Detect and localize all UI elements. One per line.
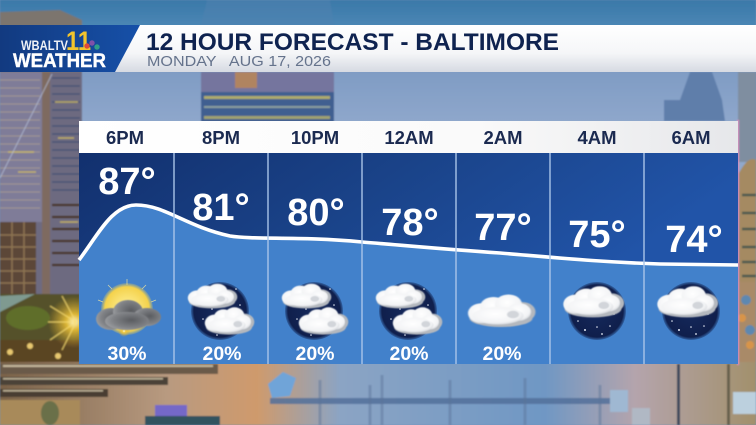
time labels: 6PM — [106, 127, 144, 148]
panel: forecast table — [79, 121, 738, 365]
time labels — [106, 127, 711, 148]
precipitation chances: 30% — [107, 343, 147, 365]
logo: WBAL TV 11 Weather: WEATHER — [13, 51, 106, 72]
time labels: 12AM — [384, 127, 434, 148]
building: right tower — [664, 72, 756, 365]
icon: mostly cloudy night 4AM — [563, 282, 626, 340]
temperature curve line — [79, 205, 738, 265]
column dividers — [174, 153, 644, 364]
precipitation chances — [107, 343, 522, 365]
title bar background — [115, 25, 756, 72]
time header row — [79, 121, 738, 153]
piers — [0, 364, 218, 425]
time labels: 4AM — [577, 127, 617, 148]
logo: WBAL TV 11 Weather: 11 — [66, 26, 91, 56]
temperatures: 87° — [98, 161, 156, 203]
icon: mostly cloudy night 6AM — [657, 282, 720, 340]
icon: partly cloudy night 8PM — [188, 282, 254, 340]
time labels: 8PM — [202, 127, 240, 148]
date line: MONDAY AUG 17, 2026 — [147, 53, 331, 70]
building: left tower — [0, 10, 82, 294]
icon: partly sunny with clouds — [96, 279, 161, 337]
temperatures: 80° — [287, 192, 345, 234]
panel: header bar — [0, 25, 756, 72]
boats and marina — [145, 364, 756, 425]
heading: 12 hour forecast: 12 HOUR FORECAST - BALTIMORE — [146, 29, 559, 56]
logo: WBAL TV 11 Weather: WBALTV — [21, 38, 68, 53]
temperatures — [98, 161, 723, 261]
temperature curve area — [79, 205, 738, 364]
logo: WBAL TV 11 Weather — [0, 25, 140, 72]
icon: cloud 2AM — [468, 294, 536, 327]
temperatures: 74° — [665, 219, 723, 261]
time labels: 2AM — [483, 127, 523, 148]
temperatures: 75° — [568, 214, 626, 256]
time labels: 6AM — [671, 127, 711, 148]
time labels: 10PM — [291, 127, 339, 148]
temperatures: 81° — [192, 187, 250, 229]
icon: partly cloudy night 12AM — [376, 282, 442, 340]
temperatures: 77° — [474, 207, 532, 249]
precipitation chances: 20% — [482, 343, 522, 365]
temperatures: 78° — [381, 202, 439, 244]
shoreline left with sun flare — [0, 294, 100, 362]
precipitation chances: 20% — [295, 343, 335, 365]
precipitation chances: 20% — [389, 343, 429, 365]
icon: partly cloudy night 10PM — [282, 282, 348, 340]
building: center tower — [201, 0, 334, 122]
upper dark region — [79, 153, 738, 268]
precipitation chances: 20% — [202, 343, 242, 365]
